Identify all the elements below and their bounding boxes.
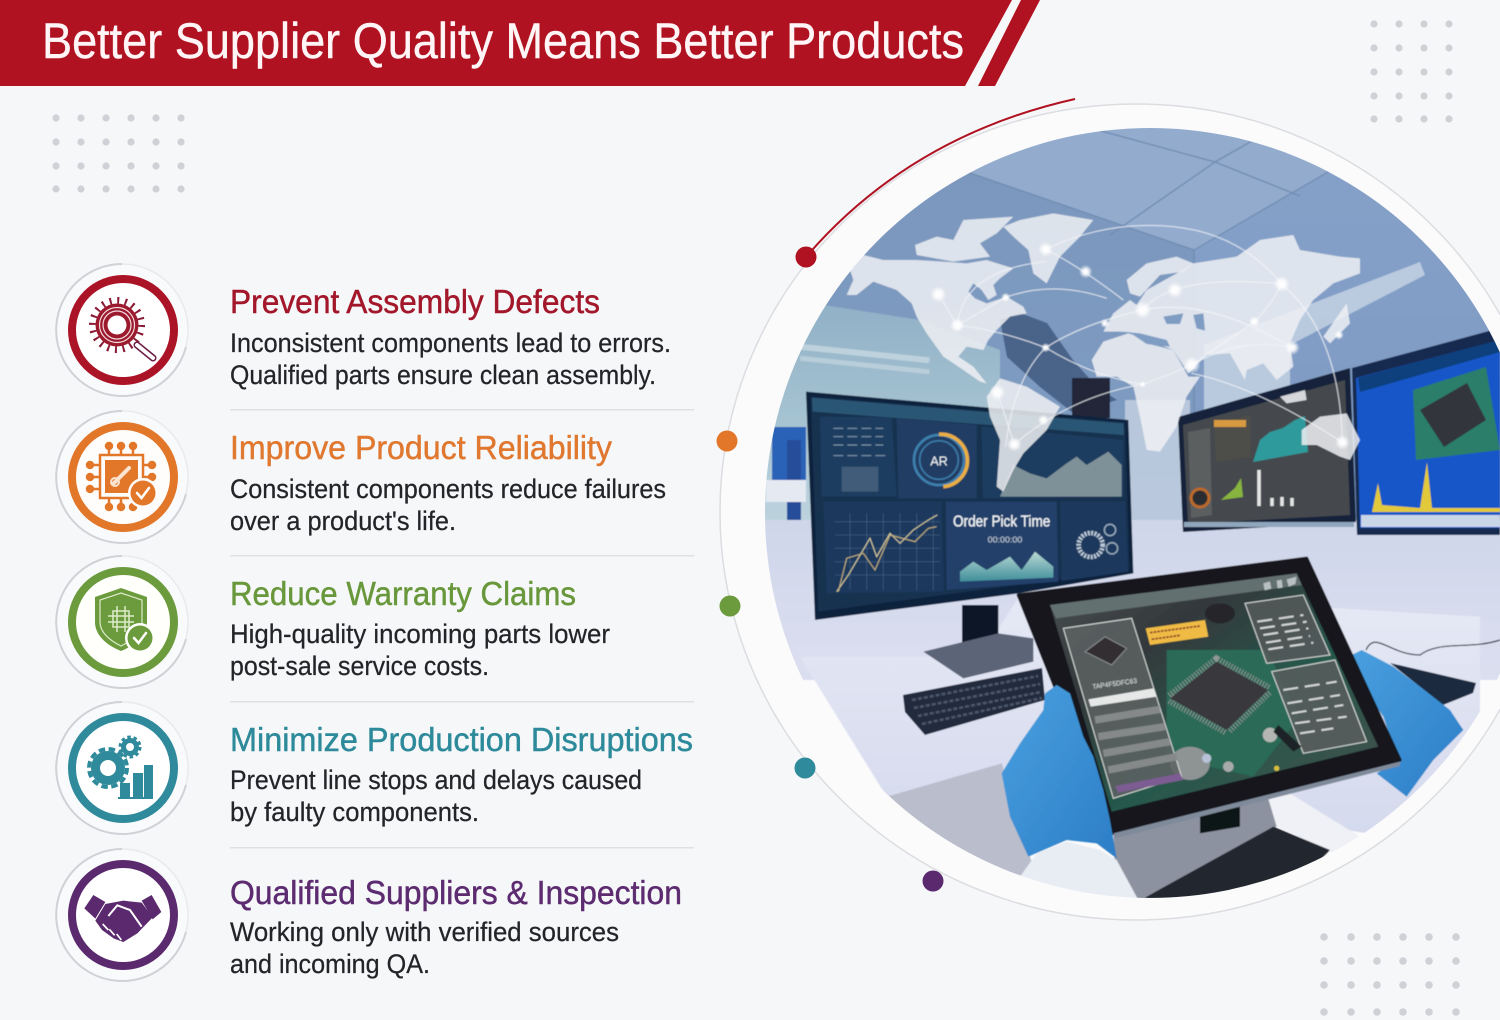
text block: reduce warranty claims	[230, 619, 610, 681]
marker: teal	[794, 758, 816, 778]
title banner	[0, 0, 1040, 86]
text block: prevent assembly defects: Inconsistent components lead to errors.	[230, 328, 671, 358]
photo: network nodes	[930, 242, 1350, 452]
item 4: minimize production disruptions	[56, 702, 693, 834]
heading: prevent assembly defects: Prevent Assembly Defects	[230, 283, 600, 320]
text block: reduce warranty claims: High-quality incoming parts lower	[230, 619, 610, 649]
photo: right gloved hand	[1345, 650, 1463, 797]
text block: minimize production disruptions: by faulty components.	[230, 797, 479, 827]
text block: qualified suppliers and inspection: and incoming QA.	[230, 949, 430, 979]
photo: main monitor	[806, 392, 1133, 678]
text block: improve product reliability: Consistent components reduce failures	[230, 474, 666, 504]
photo: main monitor: 00:00:00	[988, 535, 1023, 545]
marker: orange	[716, 430, 738, 452]
photo: tablet and hands	[1002, 558, 1463, 900]
photo: room background	[760, 120, 1500, 680]
photo: network arcs	[938, 225, 1342, 447]
photo: keyboard	[903, 640, 1500, 735]
photo: AR gauge: AR	[930, 455, 948, 469]
text block: qualified suppliers and inspection	[230, 917, 619, 979]
icon: circuit chip with check	[56, 411, 188, 543]
photo: order pick time: Order Pick Time	[953, 514, 1050, 531]
item 1: prevent assembly defects	[56, 264, 671, 396]
text block: prevent assembly defects: Qualified parts ensure clean assembly.	[230, 360, 656, 390]
heading: qualified suppliers and inspection: Qualified Suppliers & Inspection	[230, 874, 682, 911]
icon: handshake	[56, 849, 188, 981]
icon: gears and bars	[56, 702, 188, 834]
red arc accent	[806, 99, 1075, 257]
photo: left gloved hand	[1002, 685, 1117, 858]
item 2: improve product reliability	[56, 411, 666, 543]
dot grid: top left	[52, 114, 185, 193]
marker: purple	[922, 870, 944, 892]
text block: minimize production disruptions: Prevent line stops and delays caused	[230, 765, 642, 795]
marker: red	[796, 246, 816, 268]
heading: reduce warranty claims: Reduce Warranty Claims	[230, 575, 576, 612]
icon: gear under magnifier	[56, 264, 188, 396]
text block: qualified suppliers and inspection: Working only with verified sources	[230, 917, 619, 947]
photo: tablet body	[1018, 558, 1400, 838]
title banner: Better Supplier Quality Means Better Products	[42, 13, 964, 69]
photo: AR gauge	[914, 434, 967, 487]
text block: improve product reliability	[230, 474, 666, 536]
photo: desk	[800, 590, 1480, 900]
text block: prevent assembly defects	[230, 328, 671, 390]
item 3: reduce warranty claims	[56, 556, 610, 688]
icon: shield with check	[56, 556, 188, 688]
item 5: qualified suppliers and inspection	[56, 849, 682, 981]
heading: minimize production disruptions: Minimize Production Disruptions	[230, 721, 693, 758]
text block: reduce warranty claims: post-sale service costs.	[230, 651, 489, 681]
photo: lab coat sleeve	[1020, 842, 1138, 900]
marker: green	[720, 596, 740, 616]
text block: minimize production disruptions	[230, 765, 642, 827]
photo: world map overlay	[847, 213, 1360, 492]
photo: tablet body: TAP4F5DFC63	[1092, 678, 1138, 691]
photo: right monitors	[1178, 328, 1500, 535]
photo: lab with monitors, world map and tablet	[760, 120, 1500, 900]
text block: improve product reliability: over a product's life.	[230, 506, 456, 536]
heading: improve product reliability: Improve Product Reliability	[230, 429, 612, 466]
dot grid: top right	[1370, 20, 1453, 123]
gray outer ring	[720, 104, 1500, 920]
dot grid: bottom right	[1320, 933, 1460, 1016]
